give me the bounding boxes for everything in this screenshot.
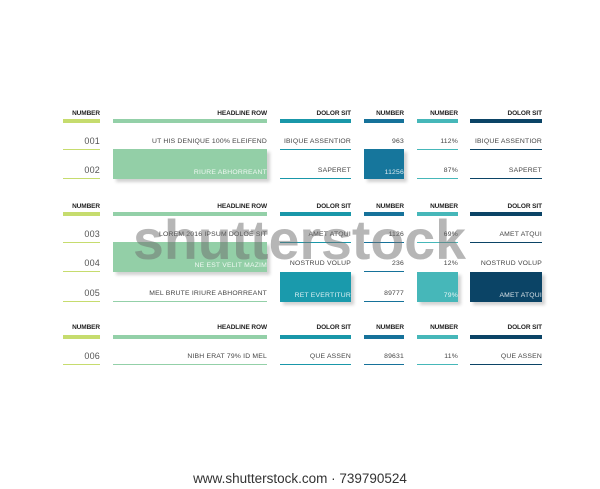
header: dolor sit 2: DOLOR SIT bbox=[508, 110, 542, 117]
header: number: NUMBER bbox=[72, 324, 100, 331]
row 004 bbox=[63, 242, 542, 276]
row 006: QUE ASSEN bbox=[310, 353, 351, 360]
header bars bbox=[63, 212, 542, 216]
row 001: 112% bbox=[440, 138, 458, 145]
section 2 bbox=[63, 203, 546, 306]
row 005: RET EVERTITUR bbox=[295, 292, 351, 299]
row 006: NIBH ERAT 79% ID MEL bbox=[187, 353, 267, 360]
header: dolor sit: DOLOR SIT bbox=[316, 203, 351, 210]
header: dolor sit 2: DOLOR SIT bbox=[508, 203, 542, 210]
row 005 bbox=[63, 272, 546, 306]
header: headline row: HEADLINE ROW bbox=[217, 324, 267, 331]
row 002: 11256 bbox=[385, 169, 404, 176]
row 001: 963 bbox=[392, 138, 404, 145]
row 001: IBIQUE ASSENTIOR bbox=[475, 138, 542, 145]
row 003 bbox=[63, 229, 542, 243]
row 004: 236 bbox=[392, 260, 404, 267]
row 005: 005 bbox=[84, 288, 100, 298]
watermark: shutterstock bbox=[133, 208, 467, 271]
row 006: QUE ASSEN bbox=[501, 353, 542, 360]
header bars bbox=[63, 119, 542, 123]
header: number 3: NUMBER bbox=[430, 110, 458, 117]
row 003: 69% bbox=[444, 231, 458, 238]
row 003: AMET ATQUI bbox=[499, 231, 542, 238]
row 006 bbox=[63, 351, 542, 365]
row 003: 003 bbox=[84, 229, 100, 239]
row 002: 002 bbox=[84, 165, 100, 175]
row 002: SAPERET bbox=[509, 167, 542, 174]
row 004: NE EST VELIT MAZIM bbox=[195, 262, 267, 269]
header: dolor sit 2: DOLOR SIT bbox=[508, 324, 542, 331]
header: number 2: NUMBER bbox=[376, 203, 404, 210]
row 001: UT HIS DENIQUE 100% ELEIFEND bbox=[152, 138, 267, 145]
row 005: 89777 bbox=[384, 290, 404, 297]
row 002: RIURE ABHORREANT bbox=[194, 169, 267, 176]
row 001: IBIQUE ASSENTIOR bbox=[284, 138, 351, 145]
row 006: 006 bbox=[84, 351, 100, 361]
header: number 2: NUMBER bbox=[376, 324, 404, 331]
header: number: NUMBER bbox=[72, 203, 100, 210]
row 006: 11% bbox=[444, 353, 458, 360]
header: number 3: NUMBER bbox=[430, 324, 458, 331]
row 005: MEL BRUTE IRIURE ABHORREANT bbox=[149, 290, 267, 297]
row 005: 79% bbox=[444, 292, 458, 299]
row 003: AMET ATQUI bbox=[308, 231, 351, 238]
header: headline row: HEADLINE ROW bbox=[217, 203, 267, 210]
row 004: 004 bbox=[84, 258, 100, 268]
row 004: NOSTRUD VOLUP bbox=[481, 260, 542, 267]
row 004: NOSTRUD VOLUP bbox=[290, 260, 351, 267]
row 005: AMET ATQUI bbox=[499, 292, 542, 299]
row 003: LOREM 2016 IPSUM DOLOE SIT bbox=[159, 231, 267, 238]
section 3 bbox=[63, 324, 542, 365]
row 001: 001 bbox=[84, 136, 100, 146]
header bars bbox=[63, 335, 542, 339]
row 002 bbox=[63, 149, 542, 184]
header: number 3: NUMBER bbox=[430, 203, 458, 210]
header: dolor sit: DOLOR SIT bbox=[316, 324, 351, 331]
row 002: SAPERET bbox=[318, 167, 351, 174]
header: dolor sit: DOLOR SIT bbox=[316, 110, 351, 117]
row 001 bbox=[63, 136, 542, 150]
header: number: NUMBER bbox=[72, 110, 100, 117]
row 002: 87% bbox=[444, 167, 458, 174]
footer: www.shutterstock.com · 739790524 bbox=[193, 471, 407, 486]
row 006: 89631 bbox=[384, 353, 404, 360]
header: number 2: NUMBER bbox=[376, 110, 404, 117]
row 004: 12% bbox=[444, 260, 458, 267]
row 003: 1126 bbox=[389, 231, 404, 238]
section 1 bbox=[63, 110, 542, 184]
header: headline row: HEADLINE ROW bbox=[217, 110, 267, 117]
